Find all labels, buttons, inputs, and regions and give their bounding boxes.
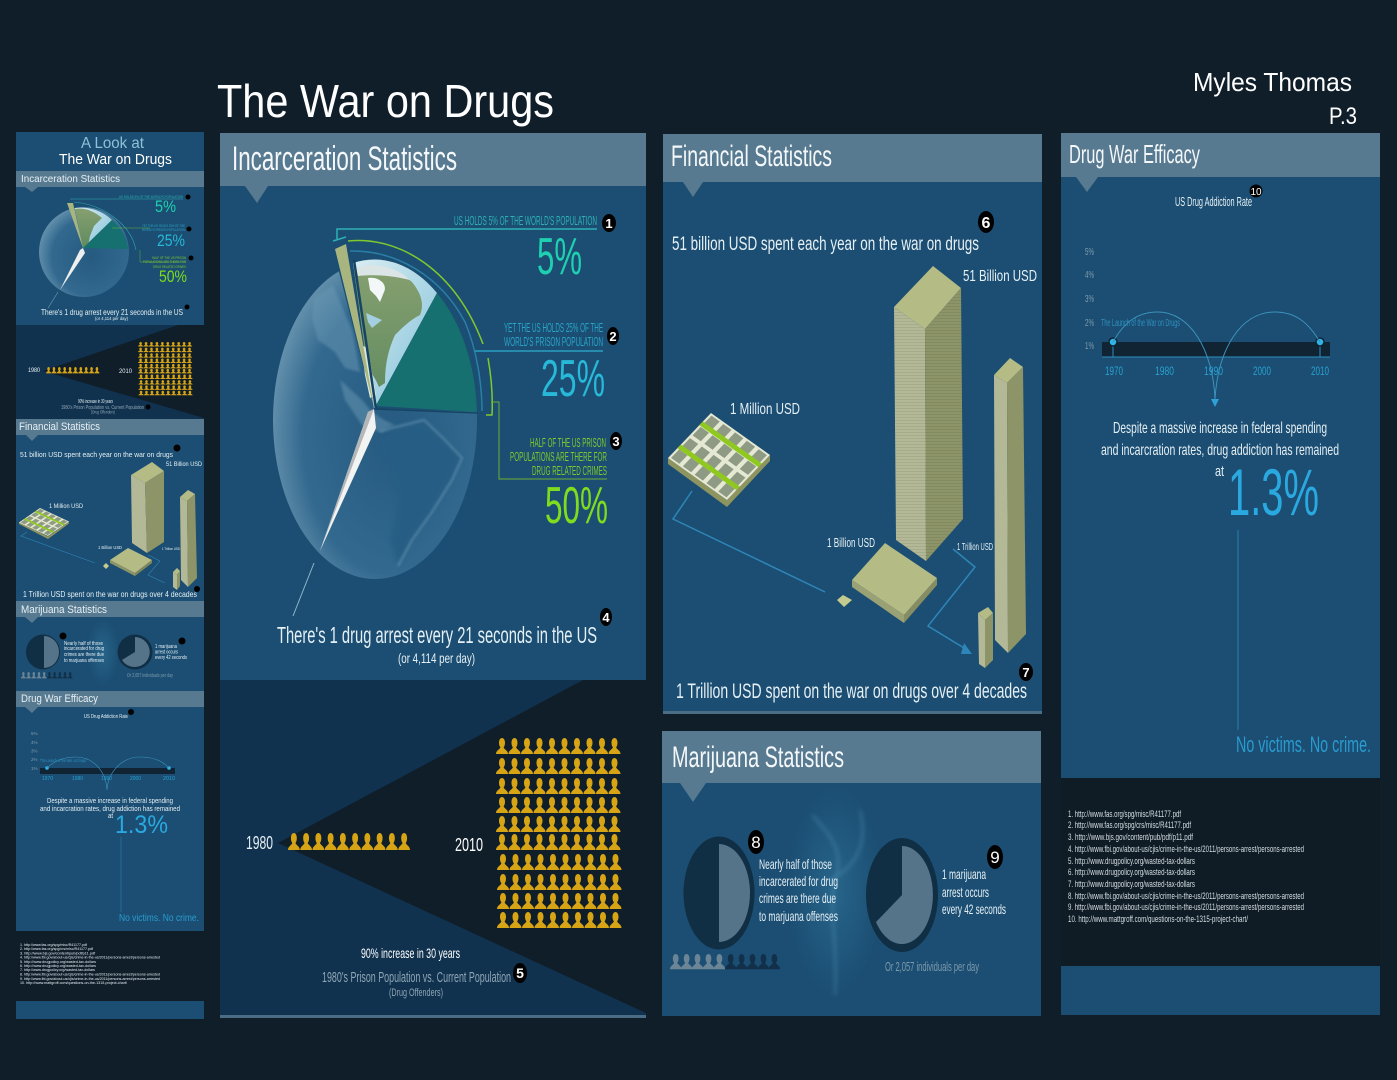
text: marijuana arrests: arrest occurs <box>942 884 989 900</box>
mini header: incarceration <box>16 171 204 192</box>
text: marijuana arrests <box>885 866 1006 974</box>
stat: 50 percent: HALF OF THE US PRISON <box>530 435 606 450</box>
addiction rate chart <box>1085 184 1330 407</box>
1980 people row: 1980 <box>246 833 273 853</box>
mini heading <box>59 135 172 168</box>
total spending text: 1 Trillion USD spent on the war on drugs over 4 decades <box>676 680 1027 703</box>
stat: 25 percent: 2 <box>609 329 617 344</box>
1 million money stack <box>668 401 800 507</box>
mini marijuana content: Or 2,057 individuals per day <box>127 673 173 679</box>
mini marijuana content: every 42 seconds <box>155 655 187 661</box>
stat: 50 percent <box>510 432 622 535</box>
addiction rate chart: 5% <box>1085 247 1094 258</box>
mini references: 5. http://www.drugpolicy.org/wasted-tax-dollars <box>20 959 96 964</box>
mini marijuana content: Nearly half of those <box>64 641 103 647</box>
annual spending text: 51 billion USD spent each year on the war on drugs <box>672 234 979 255</box>
stat: arrest frequency: There's 1 drug arrest every 21 seconds in the US <box>277 622 597 648</box>
panel: references: 10. http://www.mattgroff.com/questions-on-the-1315-project-chart/ <box>1068 914 1248 925</box>
pie: arrest frequency <box>866 838 1003 952</box>
heading: drug war efficacy: Drug War Efficacy <box>1069 139 1200 169</box>
period label: P.3 <box>1329 103 1357 130</box>
faded continents <box>312 285 395 432</box>
mini addiction chart: 1980 <box>72 776 83 782</box>
mini money stacks: 1 Trillion USD spent on the war on drugs over 4 decades <box>23 590 197 599</box>
mini money stacks <box>19 444 203 599</box>
1 trillion tower <box>957 358 1026 668</box>
panel: marijuana statistics <box>662 731 1041 1016</box>
text: marijuana offenses: incarcerated for drug <box>759 873 838 889</box>
stat: 5 percent <box>454 213 616 286</box>
stat: 50 percent: POPULATIONS ARE THERE FOR <box>510 449 607 464</box>
mini marijuana content <box>21 618 187 686</box>
addiction rate chart: 3% <box>1085 294 1094 305</box>
stat: 25 percent: WORLD'S PRISON POPULATION <box>504 334 603 349</box>
mini references: 9. http://www.fbi.gov/about-us/cjis/crime-in-the-us/2011/persons-arrest/persons-arrested <box>20 976 160 981</box>
panel: prison population cone <box>220 680 646 1018</box>
addiction rate chart: US Drug Addiction Rate <box>1175 194 1252 209</box>
1 trillion tower: 1 Trillion USD <box>957 542 993 553</box>
stat: arrest frequency: (or 4,114 per day) <box>398 650 475 666</box>
callout arcs <box>293 229 607 616</box>
mini references: 2. http://www.fas.org/spg/crs/misc/R41177.pdf <box>20 946 94 951</box>
mini money stacks: 1 Million USD <box>49 504 84 510</box>
addiction rate chart: 2000 <box>1253 364 1271 378</box>
footer band <box>1061 966 1380 1015</box>
big stat: 1.3 percent: 1.3% <box>1228 455 1319 529</box>
addiction rate chart: 10 <box>1250 187 1262 198</box>
panel: miniature overview <box>16 132 204 1019</box>
addiction rate chart: 1980 <box>1155 364 1174 378</box>
mini addiction chart: 5% <box>31 731 38 736</box>
stat: 5 percent: 1 <box>605 216 613 231</box>
panel: incarceration statistics <box>220 133 646 681</box>
addiction rate chart: 4% <box>1085 270 1094 281</box>
mini money stacks: 51 Billion USD <box>166 462 203 468</box>
mini stat labels: 25% <box>157 231 185 250</box>
text: marijuana offenses: to marjuana offenses <box>759 908 838 924</box>
heading: marijuana statistics: Marijuana Statistics <box>672 741 844 774</box>
2010 people grid: 2010 <box>455 835 483 855</box>
mini marijuana content: arrest occurs <box>155 650 178 656</box>
heading: financial statistics <box>663 134 1042 197</box>
people row: half shaded <box>670 954 780 969</box>
title: The War on Drugs <box>217 75 554 127</box>
mini references: 8. http://www.fbi.gov/about-us/cjis/crime-in-the-us/2011/persons-arrest/persons-arrested <box>20 972 160 977</box>
addiction rate chart: 2% <box>1085 318 1094 329</box>
mini references: 6. http://www.drugpolicy.org/wasted-tax-dollars <box>20 963 96 968</box>
mini addiction chart: 1.3% <box>115 811 168 839</box>
mini money stacks: 1 Billion USD <box>98 545 123 550</box>
panel: references: 2. http://www.fas.org/spg/crs/misc/R41177.pdf <box>1068 820 1191 831</box>
mini money stacks: 51 billion USD spent each year on the war on drugs <box>20 452 173 459</box>
mini stat labels: WORLD'S PRISON POPULATION <box>142 227 185 232</box>
mini references: 1. http://www.fas.org/spg/misc/R41177.pdf <box>20 942 88 947</box>
annual spending text: 6 <box>982 215 991 232</box>
mini addiction chart: 3% <box>31 748 38 754</box>
arrest spike <box>320 409 376 551</box>
mini stat labels: YET THE US HOLDS 25% OF THE <box>142 223 185 228</box>
mini references <box>16 931 204 1001</box>
mini heading: The War on Drugs <box>59 151 172 168</box>
mini addiction chart: US Drug Addiction Rate <box>84 714 128 720</box>
mini marijuana content: incarcerated for drug <box>64 646 104 652</box>
panel: references: 3. http://www.bjs.gov/content/pub/pdf/p11.pdf <box>1068 832 1193 843</box>
mini cone chart: 1980 <box>28 368 41 374</box>
connector arrows <box>673 491 975 654</box>
mini references: 7. http://www.drugpolicy.org/wasted-tax-dollars <box>20 967 95 972</box>
text: marijuana arrests: every 42 seconds <box>942 901 1006 917</box>
population caption <box>322 945 527 999</box>
author name: Myles Thomas <box>1193 67 1352 97</box>
mini addiction chart: 4% <box>31 740 38 745</box>
mini stat labels: HALF OF THE US PRISON <box>152 255 186 260</box>
stat: 25 percent: 25% <box>541 350 605 408</box>
mini addiction chart: The Launch of the War on Drugs <box>40 758 87 763</box>
panel: references: 6. http://www.drugpolicy.org/wasted-tax-dollars <box>1068 867 1195 878</box>
pie: arrest frequency: 9 <box>990 848 1000 867</box>
1 million money stack: 1 Million USD <box>730 401 800 418</box>
mini addiction chart: 1990 <box>101 776 112 782</box>
pie: half of inmates <box>684 830 764 950</box>
mini addiction chart: at <box>108 813 113 820</box>
mini stat labels: POPULATIONS ARE THERE FOR <box>143 259 186 264</box>
stat: 25 percent <box>504 320 619 408</box>
mini addiction chart: No victims. No crime. <box>119 913 199 924</box>
mini stat labels: There's 1 drug arrest every 21 seconds in the US <box>41 307 183 317</box>
mini globe chart <box>39 199 186 308</box>
stat: 25 percent: YET THE US HOLDS 25% OF THE <box>504 320 603 335</box>
text: marijuana arrests: Or 2,057 individuals per day <box>885 959 979 974</box>
globe pie chart <box>273 229 607 616</box>
heading: marijuana statistics <box>662 731 1041 802</box>
mini stat labels: DRUG RELATED CRIMES <box>153 264 186 269</box>
panel: references: 5. http://www.drugpolicy.org/wasted-tax-dollars <box>1068 856 1195 867</box>
mini heading: A Look at <box>81 135 145 152</box>
addiction rate chart: The Launch of the War on Drugs <box>1101 318 1180 329</box>
mini marijuana content: crimes are there due <box>64 652 104 658</box>
mini cone chart: 1980's Prison Population vs. Current Population <box>61 405 144 411</box>
51 billion tower <box>894 266 1037 561</box>
mini header: marijuana <box>16 601 204 623</box>
population caption: 5 <box>516 965 524 981</box>
pie: half of inmates: 8 <box>751 833 761 852</box>
annual spending text <box>672 211 994 255</box>
1980 people row <box>246 833 410 853</box>
total spending text <box>676 663 1033 703</box>
stat: 50 percent: 50% <box>545 477 608 535</box>
addiction rate chart: 1% <box>1085 341 1094 352</box>
text: marijuana offenses: crimes are there due <box>759 890 836 906</box>
1 billion slab <box>827 535 937 623</box>
mini stat labels: 50% <box>159 267 187 286</box>
mini references: 4. http://www.fbi.gov/about-us/cjis/crime-in-the-us/2011/persons-arrest/persons-arrested <box>20 955 160 960</box>
panel: references <box>1061 778 1380 966</box>
mini cone chart <box>16 325 204 419</box>
heading: drug war efficacy <box>1061 133 1380 192</box>
population sliver <box>335 244 374 408</box>
mini addiction chart: 2010 <box>163 776 175 782</box>
mini header: financial <box>16 419 204 441</box>
mini addiction chart: and incarcration rates, drug addiction has remained <box>40 804 180 813</box>
heading: financial statistics: Financial Statistics <box>671 140 832 173</box>
population caption: 1980's Prison Population vs. Current Population <box>322 969 511 986</box>
addiction conclusion text <box>1101 420 1339 480</box>
1 billion slab: 1 Billion USD <box>827 535 875 550</box>
stat: 50 percent: DRUG RELATED CRIMES <box>532 463 607 478</box>
teal wedge <box>376 293 477 412</box>
mini references: 3. http://www.bjs.gov/content/pub/pdf/p11.pdf <box>20 950 96 956</box>
mini stat labels: 5% <box>155 197 176 216</box>
mini cone chart: 2010 <box>119 369 133 375</box>
addiction rate chart: 2010 <box>1311 364 1329 378</box>
mini header: financial: Financial Statistics <box>19 421 100 433</box>
panel: drug war efficacy <box>1061 133 1380 778</box>
addiction rate chart: 1970 <box>1105 364 1123 378</box>
stat: 50 percent: 3 <box>612 434 620 449</box>
2010 people grid <box>455 738 622 928</box>
heading: incarceration statistics <box>220 133 646 203</box>
mini cone chart: 90% increase in 30 years <box>78 399 113 405</box>
mini header: efficacy <box>16 691 204 713</box>
mini header: efficacy: Drug War Efficacy <box>21 693 98 705</box>
panel: references: 1. http://www.fas.org/spg/misc/R41177.pdf <box>1068 809 1181 820</box>
mini money stacks: 1 Trillion USD <box>162 546 180 551</box>
mini stat labels: US HOLDS 5% OF THE WORLD'S POPULATION <box>119 194 183 199</box>
mini addiction chart: 1970 <box>42 776 53 782</box>
text: marijuana offenses: Nearly half of those <box>759 856 832 872</box>
mini addiction chart <box>31 709 199 924</box>
panel: financial statistics <box>663 134 1042 714</box>
text: marijuana arrests: 1 marijuana <box>942 866 986 882</box>
text: marijuana offenses <box>759 856 838 924</box>
mini addiction chart: 1% <box>31 766 38 771</box>
wedge backing gap <box>333 238 494 412</box>
51 billion tower: 51 Billion USD <box>963 268 1037 285</box>
mini stat labels: (or 4,114 per day) <box>95 316 128 321</box>
mini marijuana content: 1 marijuana <box>155 644 178 650</box>
population caption: (Drug Offenders) <box>389 987 443 999</box>
mini addiction chart: Despite a massive increase in federal spending <box>47 796 173 805</box>
stat: 5 percent: 5% <box>537 228 582 286</box>
mini addiction chart: 2000 <box>130 776 141 782</box>
population caption: 90% increase in 30 years <box>361 945 460 961</box>
panel: references: 7. http://www.drugpolicy.org/wasted-tax-dollars <box>1068 879 1195 890</box>
addiction rate chart: 1990 <box>1204 364 1223 378</box>
highlighted land wedge <box>353 259 437 409</box>
mini references: 10. http://www.mattgroff.com/questions-on-the-1315-project-chart/ <box>20 980 128 985</box>
addiction conclusion text: at <box>1215 463 1225 480</box>
stat: 5 percent: US HOLDS 5% OF THE WORLD'S POPULATION <box>454 213 597 228</box>
mini addiction chart: 2% <box>31 757 38 762</box>
heading: incarceration statistics: Incarceration Statistics <box>232 140 457 178</box>
mini header: incarceration: Incarceration Statistics <box>21 173 120 185</box>
mini cone chart: (Drug Offenders) <box>91 410 115 414</box>
mini stat labels <box>41 194 194 321</box>
connector line <box>1237 530 1239 730</box>
total spending text: 7 <box>1022 665 1030 680</box>
smoke wisp <box>787 785 883 995</box>
stat: arrest frequency <box>277 608 612 666</box>
mini marijuana content: to marjuana offenses <box>64 658 104 664</box>
stat: arrest frequency: 4 <box>602 610 610 625</box>
mini header: marijuana: Marijuana Statistics <box>21 604 107 616</box>
